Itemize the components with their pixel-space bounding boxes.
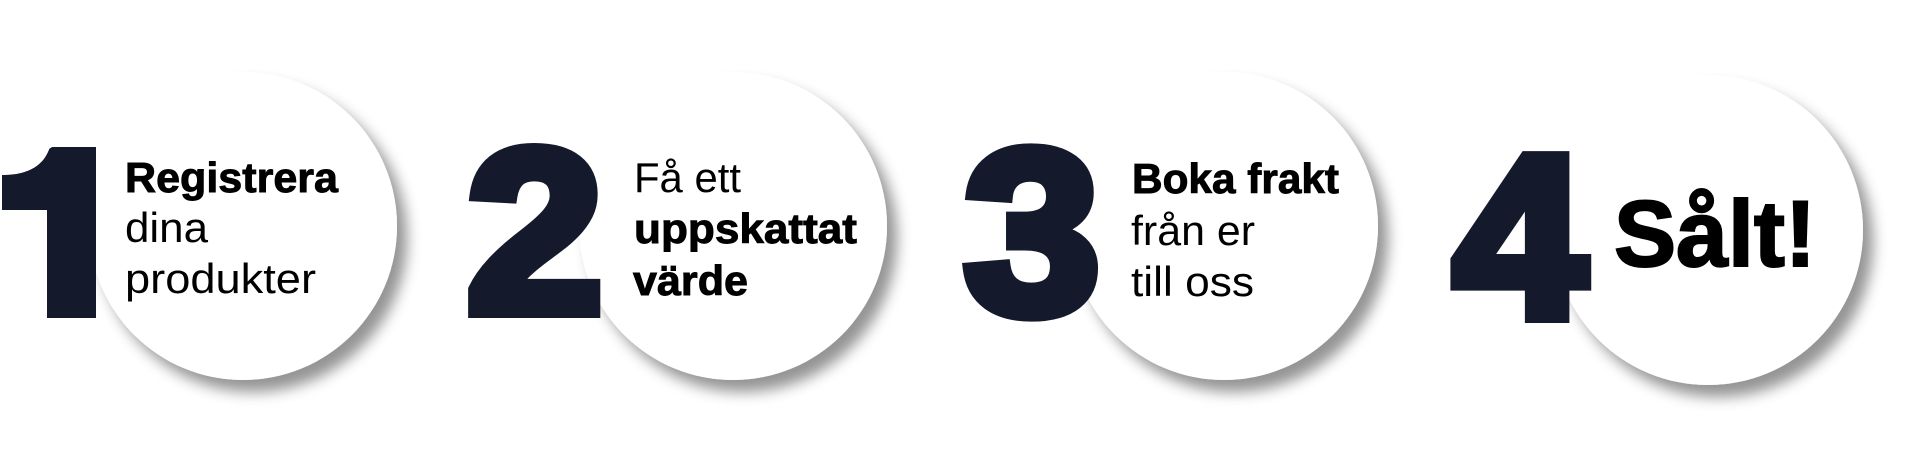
number 3: 3 — [964, 102, 1100, 362]
step 2 text: uppskattat — [634, 205, 857, 252]
number 1 — [2, 147, 96, 318]
step 2 text: värde — [633, 257, 748, 304]
step 3 text: till oss — [1131, 258, 1254, 305]
number 2: 2 — [466, 102, 603, 361]
step 3 text — [1131, 155, 1339, 305]
step 3 — [964, 72, 1378, 380]
step 3 text: från er — [1131, 207, 1255, 254]
step 1 text — [125, 154, 339, 302]
step 1 text: produkter — [125, 255, 316, 302]
circle 2 — [579, 72, 887, 380]
step 2 — [466, 72, 887, 380]
step 4 — [1454, 75, 1863, 385]
circle 3 — [1070, 72, 1378, 380]
step 3 text: Boka frakt — [1132, 155, 1339, 202]
circle 1 — [89, 72, 397, 380]
circle 4 — [1553, 75, 1863, 385]
step 1 — [0, 72, 397, 380]
number 4: 4 — [1454, 108, 1586, 366]
step 2 text — [633, 154, 857, 304]
step 1 text: Registrera — [125, 154, 339, 201]
step 2 text: Få ett — [634, 154, 741, 201]
step 1 text: dina — [125, 204, 209, 251]
step 4 text: Sålt! — [1614, 181, 1816, 286]
